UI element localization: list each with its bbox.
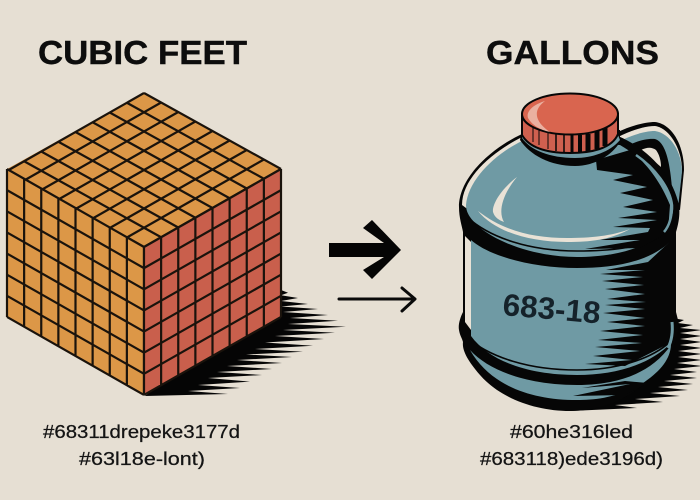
jug lower ring line (465, 336, 670, 370)
jug collar (520, 130, 620, 166)
caption: gallons: #683118)ede3196d) (480, 448, 663, 469)
jug dome shading (585, 150, 670, 249)
caption: cubic feet (43, 421, 240, 469)
jug dome (466, 141, 673, 257)
jug lower shading (573, 381, 648, 396)
title: gallons: GALLONS (486, 35, 659, 72)
cube left face (7, 169, 145, 395)
jug silhouette (459, 134, 679, 411)
jug ring line (467, 217, 662, 251)
jug lower right stripe (668, 322, 672, 348)
jug label: 683-18 (501, 287, 602, 331)
jug lower band (470, 345, 671, 400)
cube top face (7, 93, 281, 247)
jug cap (522, 94, 618, 153)
jug body edge highlight (465, 236, 471, 330)
jug dome rim stripe (636, 155, 672, 232)
jug shadow (570, 318, 700, 411)
jug handle (616, 122, 684, 210)
cube right face (144, 169, 281, 395)
jug body band (471, 240, 672, 375)
icon: jug (459, 94, 700, 411)
caption: gallons: #60he316led (510, 421, 633, 442)
caption: cubic feet: #68311drepeke3177d (43, 421, 240, 442)
jug dome edge highlight (462, 137, 522, 208)
cube shadow (145, 290, 346, 396)
jug highlights (478, 177, 630, 242)
title: cubic feet: CUBIC FEET (38, 35, 248, 72)
jug body shading (585, 236, 676, 366)
caption: gallons (480, 421, 663, 469)
arrow: bold (329, 220, 401, 279)
icon: cube with grid (7, 93, 346, 396)
caption: cubic feet: #63l18e-lont) (79, 448, 205, 469)
arrow: thin (339, 288, 415, 311)
